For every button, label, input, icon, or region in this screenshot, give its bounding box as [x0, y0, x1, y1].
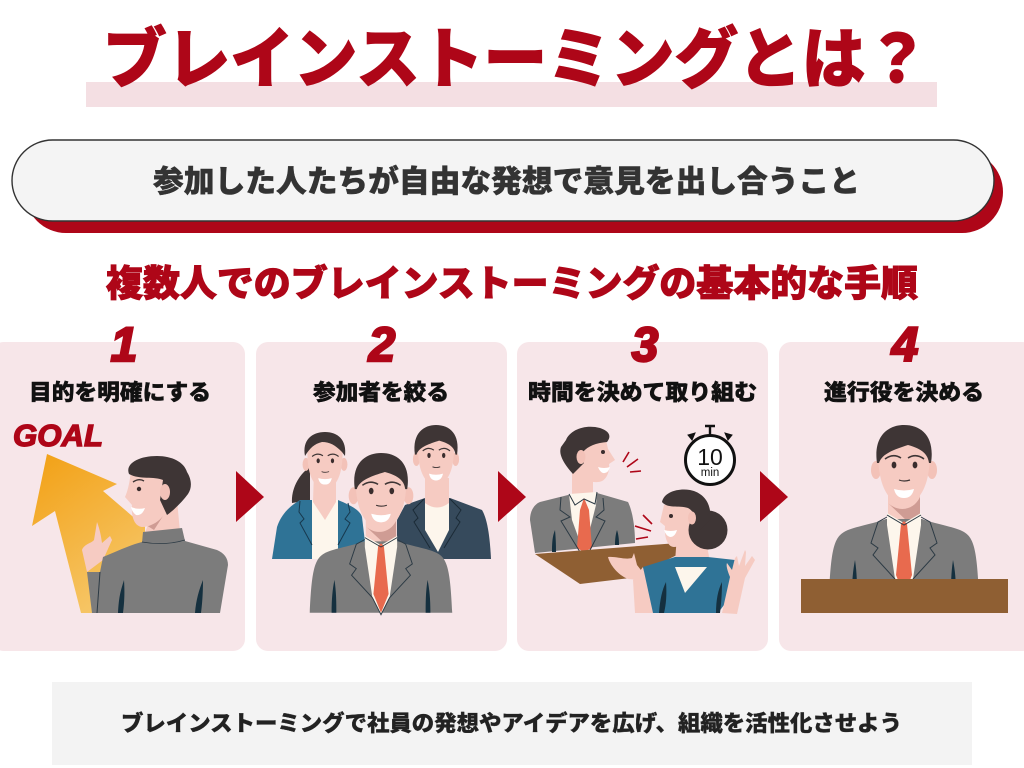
step number 2: 2	[368, 319, 396, 372]
step number 4: 4	[891, 319, 918, 372]
desk	[535, 543, 678, 584]
arrow 1 to 2	[236, 471, 264, 522]
icon: stopwatch: 10	[697, 444, 723, 470]
panel: step 3	[517, 319, 768, 651]
lectern	[801, 579, 1008, 613]
speech lines: woman	[635, 515, 652, 539]
man in grey	[310, 453, 452, 615]
definition text: 参加した人たちが自由な発想で意見を出し合うこと	[153, 164, 860, 199]
icon: stopwatch: min	[701, 467, 719, 479]
GOAL label: GOAL	[13, 418, 103, 453]
section heading: 複数人でのブレインストーミングの基本的な手順	[106, 263, 918, 304]
panel: step 4	[779, 319, 1024, 651]
woman in blue	[272, 432, 367, 559]
arrow 3 to 4	[760, 471, 788, 522]
footer band	[52, 682, 972, 765]
man speaking	[530, 427, 635, 553]
step label 1: 目的を明確にする	[29, 380, 211, 405]
step label 2: 参加者を絞る	[313, 380, 449, 405]
icon: orange arrow	[32, 454, 145, 613]
man in navy	[397, 425, 491, 559]
title band	[86, 82, 937, 107]
step label 3: 時間を決めて取り組む	[528, 380, 757, 405]
panel: step 1	[0, 319, 245, 651]
icon: stopwatch	[686, 426, 734, 484]
speech lines: man	[623, 452, 641, 472]
presenter	[829, 425, 979, 597]
definition pill	[12, 140, 1003, 233]
arrow 2 to 3	[498, 471, 526, 522]
person pointing up	[82, 456, 228, 613]
footer text: ブレインストーミングで社員の発想やアイデアを広げ、組織を活性化させよう	[121, 711, 902, 736]
title: ブレインストーミングとは？	[103, 22, 929, 96]
panel: step 2	[256, 319, 507, 651]
step number 1: 1	[111, 319, 137, 372]
step number 3: 3	[632, 319, 659, 372]
woman speaking	[608, 490, 755, 614]
step label 4: 進行役を決める	[824, 380, 984, 405]
